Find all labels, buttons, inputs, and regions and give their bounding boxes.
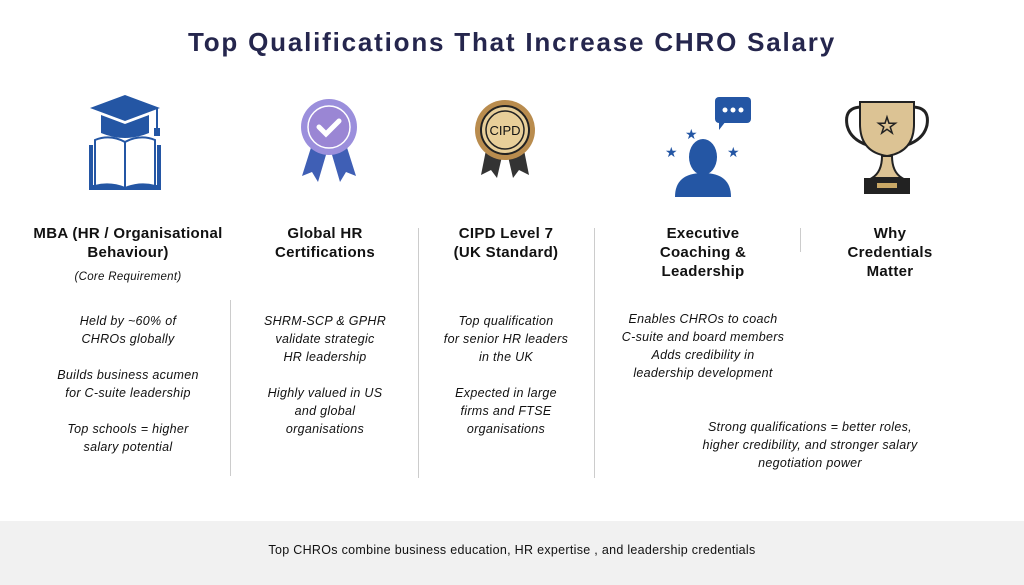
text: firms and FTSE bbox=[460, 404, 552, 418]
callout text: negotiation power bbox=[758, 456, 862, 470]
heading: (UK Standard) bbox=[454, 244, 558, 261]
text bbox=[622, 312, 784, 380]
heading bbox=[660, 225, 746, 280]
icon: CIPD seal: CIPD bbox=[489, 123, 521, 138]
text: C-suite and board members bbox=[622, 330, 784, 344]
callout text: higher credibility, and stronger salary bbox=[702, 438, 918, 452]
text: Expected in large bbox=[455, 386, 557, 400]
icon: coach person: ★ bbox=[665, 144, 678, 160]
column 1: MBA bbox=[33, 225, 223, 454]
column 2: Global HR bbox=[264, 225, 386, 436]
icon: ribbon badge bbox=[301, 99, 357, 182]
callout text bbox=[702, 420, 918, 470]
icon: coach person bbox=[665, 97, 751, 197]
text: organisations bbox=[286, 422, 364, 436]
title: Top Qualifications That Increase CHRO Salary bbox=[188, 27, 836, 57]
heading: Coaching & bbox=[660, 244, 746, 261]
text: and global bbox=[295, 404, 355, 418]
icon: CIPD seal bbox=[475, 100, 535, 178]
text bbox=[264, 314, 386, 436]
callout text: Strong qualifications = better roles, bbox=[708, 420, 912, 434]
heading: Executive bbox=[667, 225, 739, 242]
icon: coach person: ★ bbox=[685, 126, 698, 142]
text bbox=[444, 314, 568, 436]
footer band bbox=[0, 521, 1024, 585]
text: organisations bbox=[467, 422, 545, 436]
text: MBA points: for C-suite leadership bbox=[65, 386, 191, 400]
footer text: Top CHROs combine business education, HR expertise , and leadership credentials bbox=[268, 543, 756, 557]
heading bbox=[848, 225, 932, 280]
heading bbox=[454, 225, 558, 261]
column 5: Why credentials matter bbox=[848, 225, 932, 280]
text: MBA points bbox=[57, 314, 199, 454]
dividers bbox=[230, 300, 231, 476]
text: for senior HR leaders bbox=[444, 332, 568, 346]
heading bbox=[275, 225, 375, 261]
text: SHRM-SCP & GPHR bbox=[264, 314, 386, 328]
text: MBA points: Top schools = higher bbox=[67, 422, 189, 436]
text: HR leadership bbox=[283, 350, 367, 364]
column 4: Executive coaching bbox=[622, 225, 784, 380]
column 3: CIPD bbox=[444, 225, 568, 436]
text: MBA points: CHROs globally bbox=[81, 332, 175, 346]
icon: graduation cap and book bbox=[89, 95, 161, 190]
heading: Credentials bbox=[848, 244, 932, 261]
text: leadership development bbox=[633, 366, 773, 380]
heading: Certifications bbox=[275, 244, 375, 261]
icon: trophy bbox=[845, 101, 929, 194]
icon: trophy: ★ bbox=[877, 113, 897, 138]
heading: Why bbox=[874, 225, 906, 242]
text: MBA points: Builds business acumen bbox=[57, 368, 199, 382]
text: in the UK bbox=[479, 350, 533, 364]
heading: CIPD Level 7 bbox=[459, 225, 553, 242]
text: MBA points: salary potential bbox=[84, 440, 172, 454]
icon: coach person: ★ bbox=[727, 144, 740, 160]
subtitle: (Core Requirement) bbox=[74, 271, 182, 283]
text: Enables CHROs to coach bbox=[628, 312, 778, 326]
text: Adds credibility in bbox=[652, 348, 754, 362]
text: validate strategic bbox=[275, 332, 375, 346]
heading: Global HR bbox=[287, 225, 363, 242]
text: Top qualification bbox=[458, 314, 553, 328]
text: MBA points: Held by ~60% of bbox=[80, 314, 176, 328]
text: Highly valued in US bbox=[268, 386, 382, 400]
heading: Matter bbox=[867, 263, 913, 280]
heading: Leadership bbox=[661, 263, 745, 280]
heading: MBA: MBA (HR / Organisational Behaviour) bbox=[33, 225, 223, 261]
